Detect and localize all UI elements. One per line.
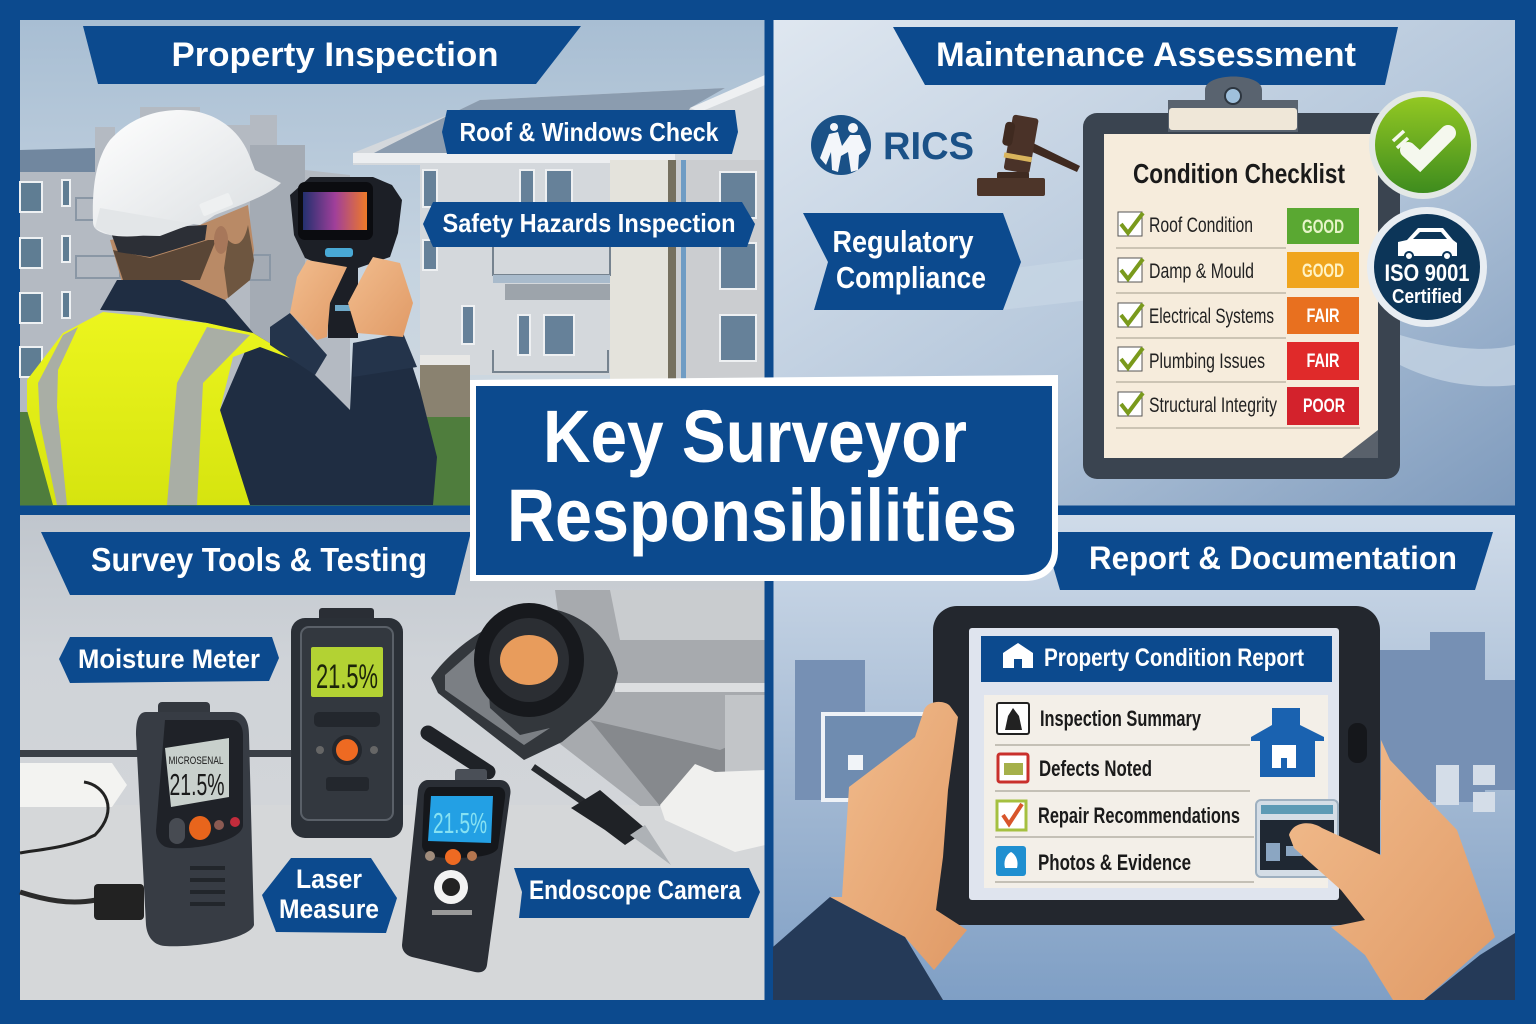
item: inspection summary: Inspection Summary: [1040, 706, 1202, 731]
label: laser measure: Laser: [296, 864, 362, 894]
logo: RICS: [811, 115, 974, 175]
clipboard clip: [1168, 76, 1298, 132]
icon: photo thumbnail: [1256, 800, 1338, 877]
title panel: Responsibilities: [507, 474, 1017, 557]
panel: report and documentation: [773, 515, 1515, 1000]
device: moisture meter, centre: [291, 608, 403, 838]
device: moisture meter, right: [402, 769, 511, 972]
heading: survey tools and testing: Survey Tools & Testing: [91, 541, 427, 578]
icon: blue house: [1251, 708, 1324, 777]
heading: property inspection: [83, 26, 581, 84]
icon: wall socket and cable: [20, 763, 144, 920]
device: moisture meter, centre: 21.5%: [316, 658, 378, 696]
logo: RICS: RICS: [883, 125, 974, 168]
device: moisture meter, left: [136, 702, 254, 946]
item: repair recommendations: [997, 801, 1240, 830]
report header: Property Condition Report: [1044, 644, 1305, 672]
callout: regulatory compliance: Regulatory: [832, 224, 974, 259]
vest: [27, 312, 303, 505]
row: damp and mould: [1118, 252, 1359, 288]
badge: ISO 9001 certified: Certified: [1392, 286, 1462, 308]
item: photos and evidence: [996, 846, 1191, 876]
label: moisture meter: [59, 637, 279, 683]
row: roof condition: GOOD: [1302, 217, 1344, 238]
grass: [20, 412, 480, 506]
row: electrical systems: [1118, 297, 1359, 334]
label: moisture meter: Moisture Meter: [78, 644, 260, 674]
panel: survey tools and testing: [20, 515, 765, 1000]
row: structural integrity: POOR: [1303, 396, 1345, 417]
badge: ISO 9001 certified: [1367, 207, 1487, 327]
report header: [981, 636, 1332, 682]
label: endoscope camera: Endoscope Camera: [529, 875, 742, 905]
heading: maintenance assessment: [893, 27, 1398, 85]
row: structural integrity: [1118, 387, 1359, 425]
row: electrical systems: FAIR: [1306, 306, 1340, 327]
label: endoscope camera: [514, 868, 760, 918]
heading: maintenance assessment: Maintenance Assessment: [936, 36, 1356, 74]
item: photos and evidence: Photos & Evidence: [1038, 850, 1191, 875]
device: moisture meter, right: 21.5%: [433, 808, 487, 840]
hand: left: [773, 702, 967, 1000]
collar: [100, 280, 255, 335]
title panel: [470, 375, 1058, 581]
device: moisture meter, left: 21.5%: [170, 767, 224, 802]
badge: green check: [1369, 91, 1477, 199]
tablet: property condition report: [933, 606, 1380, 925]
heading: report and documentation: [1043, 532, 1493, 590]
head: [110, 205, 254, 300]
device: moisture meter, left: MICROSENAL: [168, 755, 224, 767]
device: endoscope camera: [428, 603, 671, 865]
row: roof condition: Roof Condition: [1149, 214, 1253, 237]
row: damp and mould: Damp & Mould: [1149, 260, 1254, 283]
item: defects noted: [998, 754, 1152, 782]
sleeve and cuffs: [270, 313, 327, 375]
row: plumbing issues: FAIR: [1306, 351, 1340, 372]
label: roof and windows check: [442, 110, 738, 154]
row: damp and mould: GOOD: [1302, 261, 1344, 282]
panel: maintenance assessment: [773, 20, 1515, 506]
background building left: [20, 107, 350, 420]
row: plumbing issues: [1118, 342, 1359, 380]
callout: regulatory compliance: Compliance: [836, 260, 986, 295]
label: laser measure: Measure: [279, 894, 379, 924]
item: inspection summary: [997, 703, 1202, 734]
jacket body: [220, 333, 437, 505]
item: defects noted: Defects Noted: [1039, 756, 1152, 781]
heading: survey tools and testing: [41, 532, 471, 595]
checklist title: Condition Checklist: [1133, 158, 1345, 189]
main building: [353, 75, 765, 417]
row: plumbing issues: Plumbing Issues: [1149, 350, 1265, 373]
row: roof condition: [1118, 208, 1359, 244]
hand: right: [1289, 740, 1515, 1000]
label: roof and windows check: Roof & Windows Check: [460, 117, 719, 147]
hands: [290, 260, 347, 340]
item: repair recommendations: Repair Recommendations: [1038, 803, 1240, 828]
label: laser measure: [262, 858, 397, 933]
heading: report and documentation: Report & Documentation: [1089, 540, 1457, 576]
surveyor: [27, 110, 437, 505]
label: safety hazards inspection: [423, 202, 755, 247]
callout: regulatory compliance: [803, 213, 1021, 310]
panel: property inspection: [20, 20, 765, 506]
row: structural integrity: Structural Integrity: [1149, 394, 1277, 417]
row: electrical systems: Electrical Systems: [1149, 305, 1274, 328]
icon: gavel: [977, 113, 1080, 196]
title panel: Key Surveyor: [543, 395, 967, 478]
clipboard: condition checklist: [1083, 76, 1400, 479]
label: safety hazards inspection: Safety Hazards Inspection: [442, 208, 736, 238]
badge: ISO 9001 certified: ISO 9001: [1384, 260, 1470, 287]
heading: property inspection: Property Inspection: [172, 36, 498, 74]
thermal camera: [290, 177, 402, 338]
icon: hard hat: [93, 110, 281, 236]
